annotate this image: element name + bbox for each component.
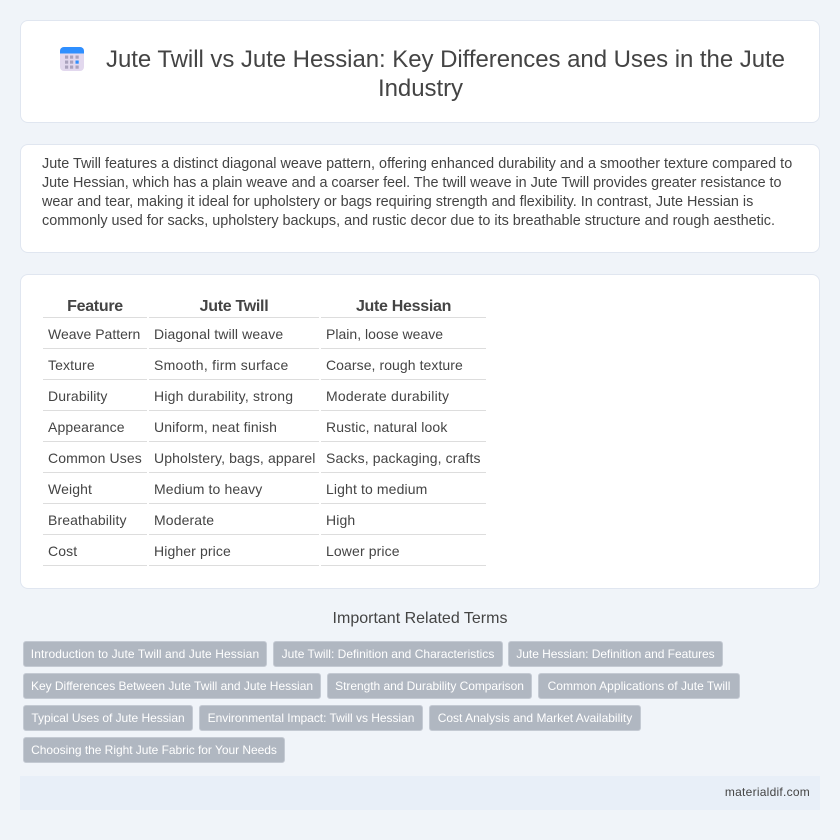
related terms tags: Key Differences Between Jute Twill and Jute Hessian bbox=[31, 679, 313, 693]
comparison table: Appearance bbox=[48, 419, 125, 435]
panel: header bbox=[20, 20, 820, 123]
related terms tags: Introduction to Jute Twill and Jute Hessian bbox=[31, 647, 259, 661]
comparison table: Breathability bbox=[48, 512, 127, 528]
comparison table: Diagonal twill weave bbox=[154, 326, 283, 342]
comparison table: Feature bbox=[67, 298, 123, 315]
table header bbox=[43, 298, 486, 566]
comparison table: Jute Twill bbox=[200, 298, 268, 315]
footer bar bbox=[20, 776, 820, 810]
comparison table: Sacks, packaging, crafts bbox=[326, 450, 481, 466]
icon: calendar bbox=[60, 47, 84, 71]
comparison table bbox=[43, 298, 486, 566]
text block: introduction: Jute Hessian, which has a plain weave and a coarser feel. The twill weave in Jute Twill provides greater resistance to bbox=[42, 175, 781, 191]
comparison table: Common Uses bbox=[48, 450, 142, 466]
footer source text: materialdif.com bbox=[725, 785, 810, 799]
text block: introduction: Jute Twill features a distinct diagonal weave pattern, offering enhanced durability and a smoother texture compared to bbox=[42, 156, 792, 172]
comparison table: Weave Pattern bbox=[48, 326, 140, 342]
comparison table: High bbox=[326, 512, 355, 528]
comparison table: Medium to heavy bbox=[154, 481, 262, 497]
comparison table: Texture bbox=[48, 357, 95, 373]
related terms tags: Environmental Impact: Twill vs Hessian bbox=[208, 711, 414, 725]
related terms tags bbox=[23, 641, 740, 763]
comparison table: Moderate durability bbox=[326, 388, 449, 404]
related terms tags: Choosing the Right Jute Fabric for Your Needs bbox=[31, 743, 277, 757]
text block: introduction bbox=[42, 156, 792, 229]
comparison table: Plain, loose weave bbox=[326, 326, 443, 342]
comparison table: Uniform, neat finish bbox=[154, 419, 277, 435]
related terms tags: Strength and Durability Comparison bbox=[335, 679, 524, 693]
panel: introduction bbox=[20, 144, 820, 253]
comparison table: Higher price bbox=[154, 543, 231, 559]
related terms tags: Jute Twill: Definition and Characteristics bbox=[282, 647, 494, 661]
text block: introduction: commonly used for sacks, upholstery backups, and rustic decor due to its breathable structure and rough aesthetic. bbox=[42, 213, 775, 229]
comparison table: Upholstery, bags, apparel bbox=[154, 450, 316, 466]
comparison table: Lower price bbox=[326, 543, 400, 559]
comparison table: Coarse, rough texture bbox=[326, 357, 463, 373]
comparison table: Durability bbox=[48, 388, 108, 404]
related terms tags: Jute Hessian: Definition and Features bbox=[516, 647, 715, 661]
related terms tags: Common Applications of Jute Twill bbox=[548, 679, 730, 693]
title: Industry bbox=[378, 75, 463, 102]
title bbox=[106, 46, 785, 102]
related terms tags: Typical Uses of Jute Hessian bbox=[31, 711, 185, 725]
comparison table: Jute Hessian bbox=[356, 298, 451, 315]
title: Jute Twill vs Jute Hessian: Key Differences and Uses in the Jute bbox=[106, 46, 785, 73]
comparison table: Weight bbox=[48, 481, 92, 497]
heading: important related terms: Important Related Terms bbox=[333, 610, 507, 627]
comparison table: Moderate bbox=[154, 512, 214, 528]
related terms tags: Cost Analysis and Market Availability bbox=[438, 711, 632, 725]
comparison table: Smooth, firm surface bbox=[154, 357, 289, 373]
text block: introduction: wear and tear, making it ideal for upholstery or bags requiring strength and flexibility. In contrast, Jute Hessian is bbox=[42, 194, 753, 210]
panel: comparison table bbox=[20, 274, 820, 589]
comparison table: Rustic, natural look bbox=[326, 419, 447, 435]
comparison table: High durability, strong bbox=[154, 388, 293, 404]
comparison table: Light to medium bbox=[326, 481, 427, 497]
comparison table: Cost bbox=[48, 543, 77, 559]
